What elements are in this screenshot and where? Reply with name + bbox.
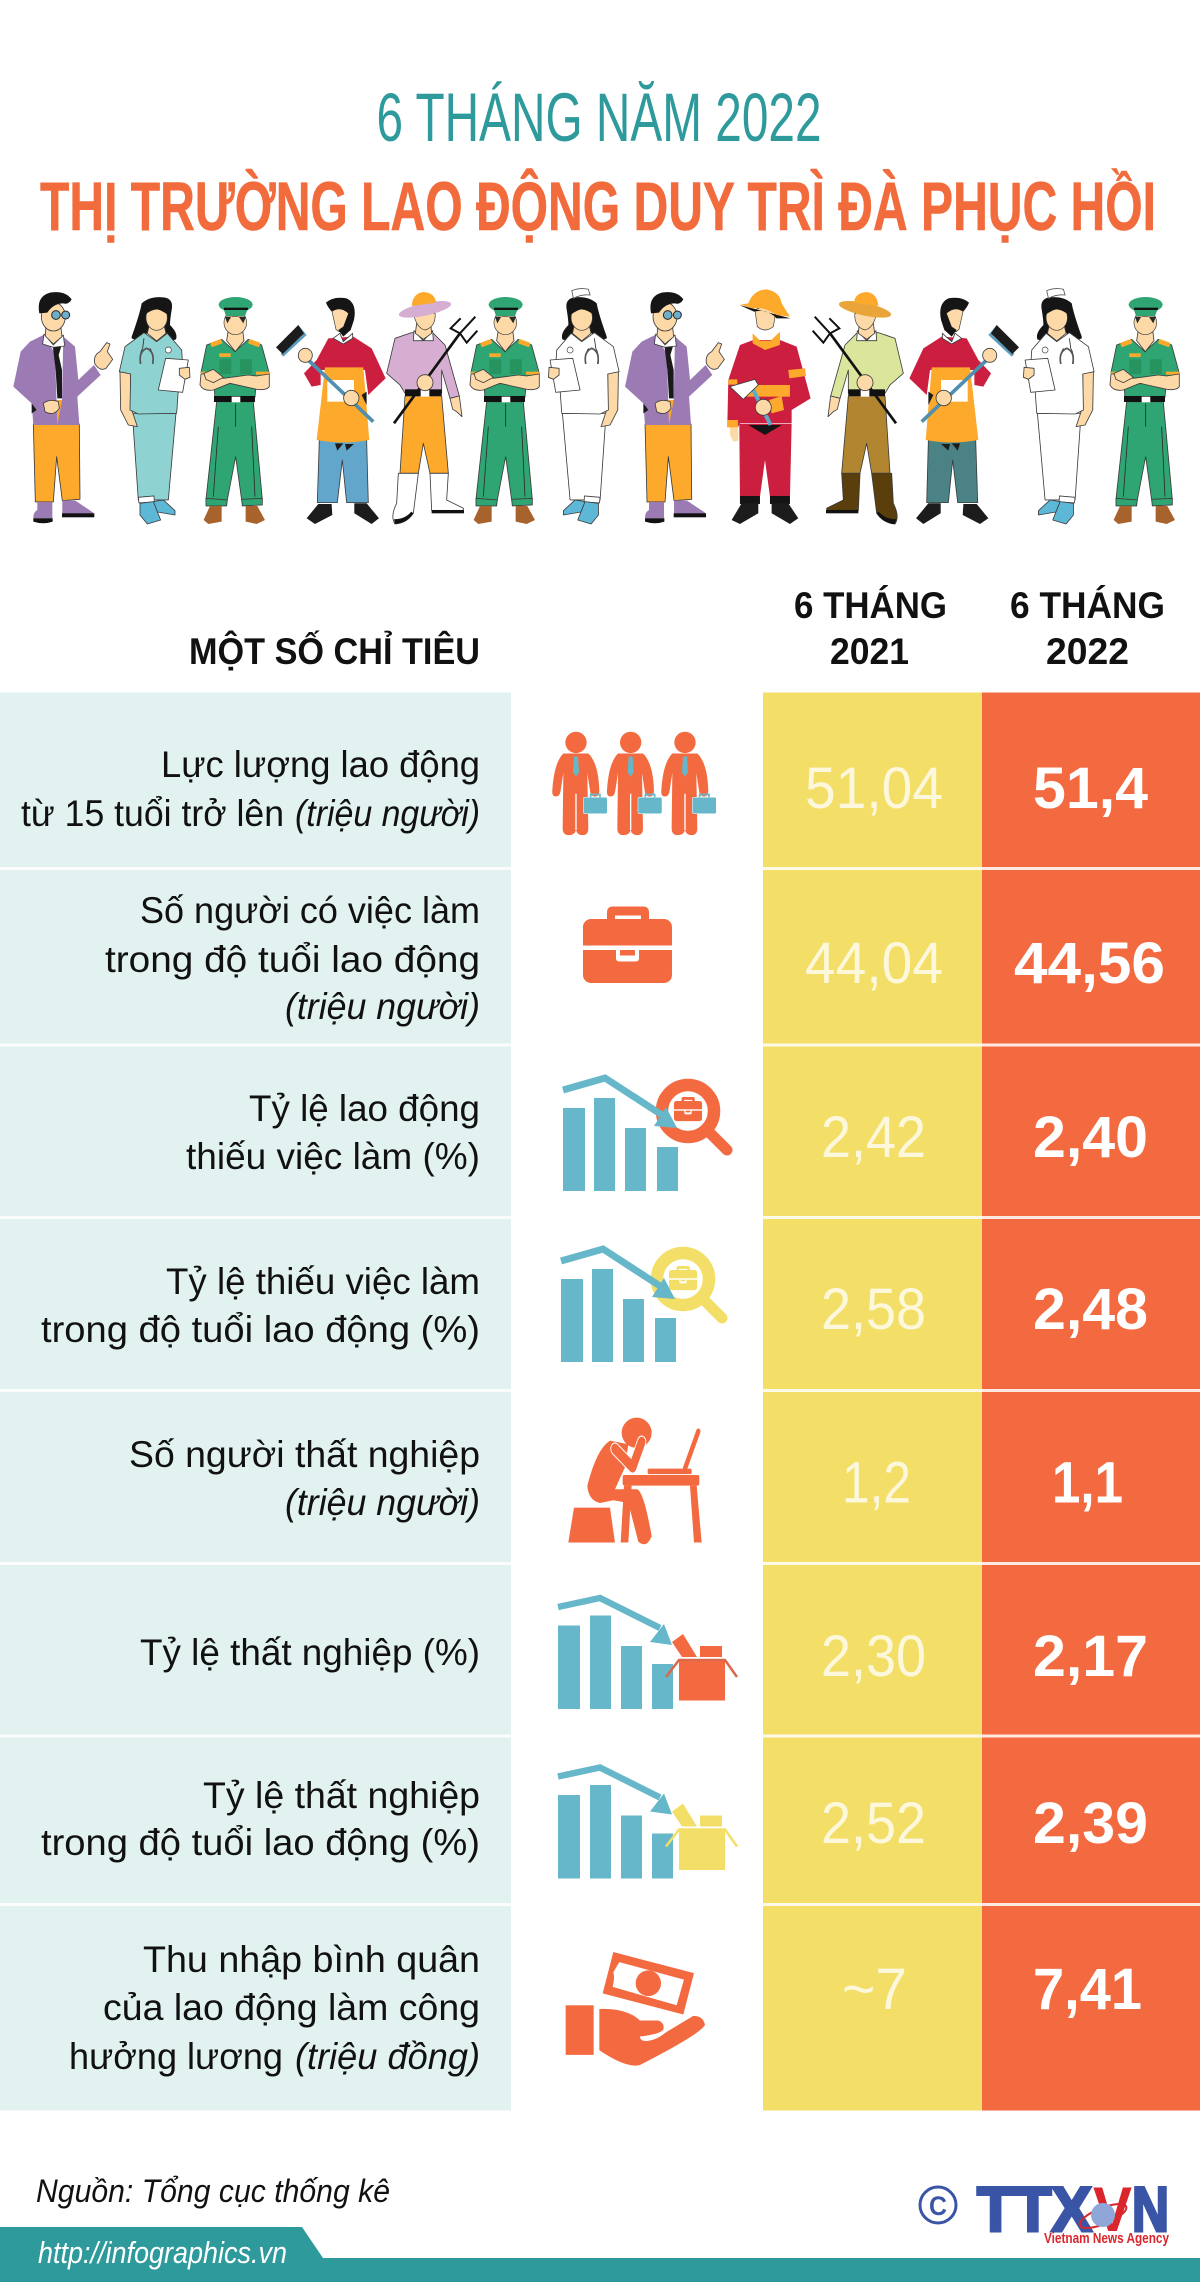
title line 1: 6 THÁNG NĂM 2022 (376, 79, 822, 156)
worker: soldier in green 2 (470, 297, 539, 524)
table backgrounds (0, 692, 1200, 2110)
row 1: labour force (21, 732, 1148, 835)
footer URL: http://infographics.vn (38, 2235, 287, 2270)
row 2: employed people (105, 890, 1165, 1027)
value 2021: 2,30 (821, 1624, 926, 1689)
worker: nurse in white (548, 289, 619, 524)
worker: apron man, blue jeans (276, 298, 386, 524)
row 1 label (21, 744, 480, 834)
row 5 label: (triệu người) (285, 1482, 480, 1523)
row 8 label: của lao động làm công (103, 1987, 480, 2028)
value 2021: 2,42 (821, 1105, 926, 1170)
row 2 label: Số người có việc làm (140, 890, 480, 931)
worker: soldier in green (200, 297, 269, 524)
icon: worried person at laptop (568, 1418, 702, 1544)
icon: falling bars with yellow box (558, 1768, 737, 1878)
value 2022: 2,39 (1033, 1791, 1148, 1856)
footer band with URL (0, 2227, 1200, 2282)
row 8 label: Thu nhập bình quân (143, 1939, 480, 1980)
agency letters: V (1093, 2175, 1132, 2245)
row 3 label: thiếu việc làm (%) (186, 1136, 480, 1177)
agency letters: N (1132, 2175, 1169, 2245)
worker: farmer in pink (387, 292, 477, 524)
icon: briefcase (583, 906, 672, 983)
icon: falling bars with orange magnifier (563, 1078, 727, 1191)
header: indicators: MỘT SỐ CHỈ TIÊU (189, 630, 480, 672)
row 7 label: Tỷ lệ thất nghiệp (203, 1775, 480, 1816)
row 8: average income (69, 1939, 1142, 2077)
row 1 label: Lực lượng lao động (161, 744, 480, 785)
title (40, 79, 1156, 245)
icon: three workers with briefcases (552, 732, 716, 835)
header: first half 2021 (794, 585, 947, 672)
value 2022: 2,17 (1033, 1624, 1148, 1689)
agency letters: TTX (977, 2175, 1092, 2245)
row 4: underemployment in working age (41, 1249, 1148, 1362)
worker: firefighter in red (727, 289, 811, 524)
agency name: Vietnam News Agency (1044, 2231, 1169, 2247)
row 8 label (69, 1939, 480, 2077)
worker: farmer in green (813, 292, 903, 524)
value 2022: 7,41 (1033, 1957, 1142, 2022)
row 8 label: (triệu đồng) (295, 2036, 480, 2077)
row 3: underemployment rate (186, 1078, 1148, 1191)
worker: soldier in green 3 (1110, 297, 1179, 524)
row 5 label: Số người thất nghiệp (129, 1434, 480, 1475)
row 2 label: trong độ tuổi lao động (105, 939, 480, 980)
row 7 label (41, 1775, 480, 1863)
value 2022: 2,48 (1033, 1277, 1148, 1342)
row 6 label: Tỷ lệ thất nghiệp (%) (140, 1632, 480, 1673)
header: first half 2022 (1010, 585, 1165, 672)
value 2021: 51,04 (805, 756, 943, 821)
row 6: unemployment rate (140, 1598, 1148, 1709)
copyright mark: C (929, 2191, 947, 2221)
row 8 label: hưởng lương (69, 2036, 283, 2077)
logo: TTXVN (920, 2175, 1169, 2247)
value 2021: 44,04 (805, 931, 943, 996)
value 2022: 44,56 (1014, 931, 1165, 996)
value 2022: 2,40 (1033, 1105, 1148, 1170)
worker: nurse in white 2 (1023, 289, 1094, 524)
row 2 label (105, 890, 480, 1027)
row 7 label: trong độ tuổi lao động (%) (41, 1822, 480, 1863)
header: first half 2022: 2022 (1046, 631, 1129, 672)
row 3 label (186, 1088, 480, 1177)
row 1 label: (triệu người) (295, 793, 480, 834)
value 2021: 2,52 (821, 1791, 926, 1856)
copyright mark (920, 2187, 956, 2223)
header: first half 2021: 6 THÁNG (794, 585, 947, 626)
row 5: unemployed people (129, 1418, 1123, 1544)
row 2 label: (triệu người) (285, 986, 480, 1027)
worker: doctor in teal (119, 297, 190, 524)
row 5 label (129, 1434, 480, 1523)
source note: Nguồn: Tổng cục thống kê (36, 2173, 390, 2209)
globe (1077, 2199, 1129, 2233)
worker: apron man, teal trousers (909, 298, 1019, 524)
row 4 label: trong độ tuổi lao động (%) (41, 1309, 480, 1350)
icon: hand holding banknote (566, 1952, 705, 2066)
table header (189, 585, 1165, 672)
value 2022: 1,1 (1052, 1450, 1123, 1516)
icon: falling bars with yellow magnifier (561, 1249, 722, 1362)
row 4 label (41, 1261, 480, 1350)
row 1 label: từ 15 tuổi trở lên (21, 793, 284, 834)
agency letters (977, 2175, 1169, 2245)
row 4 label: Tỷ lệ thiếu việc làm (166, 1261, 480, 1302)
worker: man in purple jacket 2 (625, 292, 724, 523)
header: first half 2021: 2021 (830, 631, 909, 672)
value 2022: 51,4 (1033, 756, 1148, 821)
row 3 label: Tỷ lệ lao động (249, 1088, 480, 1129)
row 7: unemployment in working age (41, 1768, 1148, 1878)
value 2021: ~7 (842, 1957, 907, 2022)
illustration: row of workers (13, 289, 1179, 524)
icon: falling bars with orange box (558, 1598, 737, 1709)
value 2021: 1,2 (842, 1450, 911, 1516)
value 2021: 2,58 (821, 1277, 926, 1342)
header: first half 2022: 6 THÁNG (1010, 585, 1165, 626)
worker: man in purple jacket (13, 292, 113, 523)
